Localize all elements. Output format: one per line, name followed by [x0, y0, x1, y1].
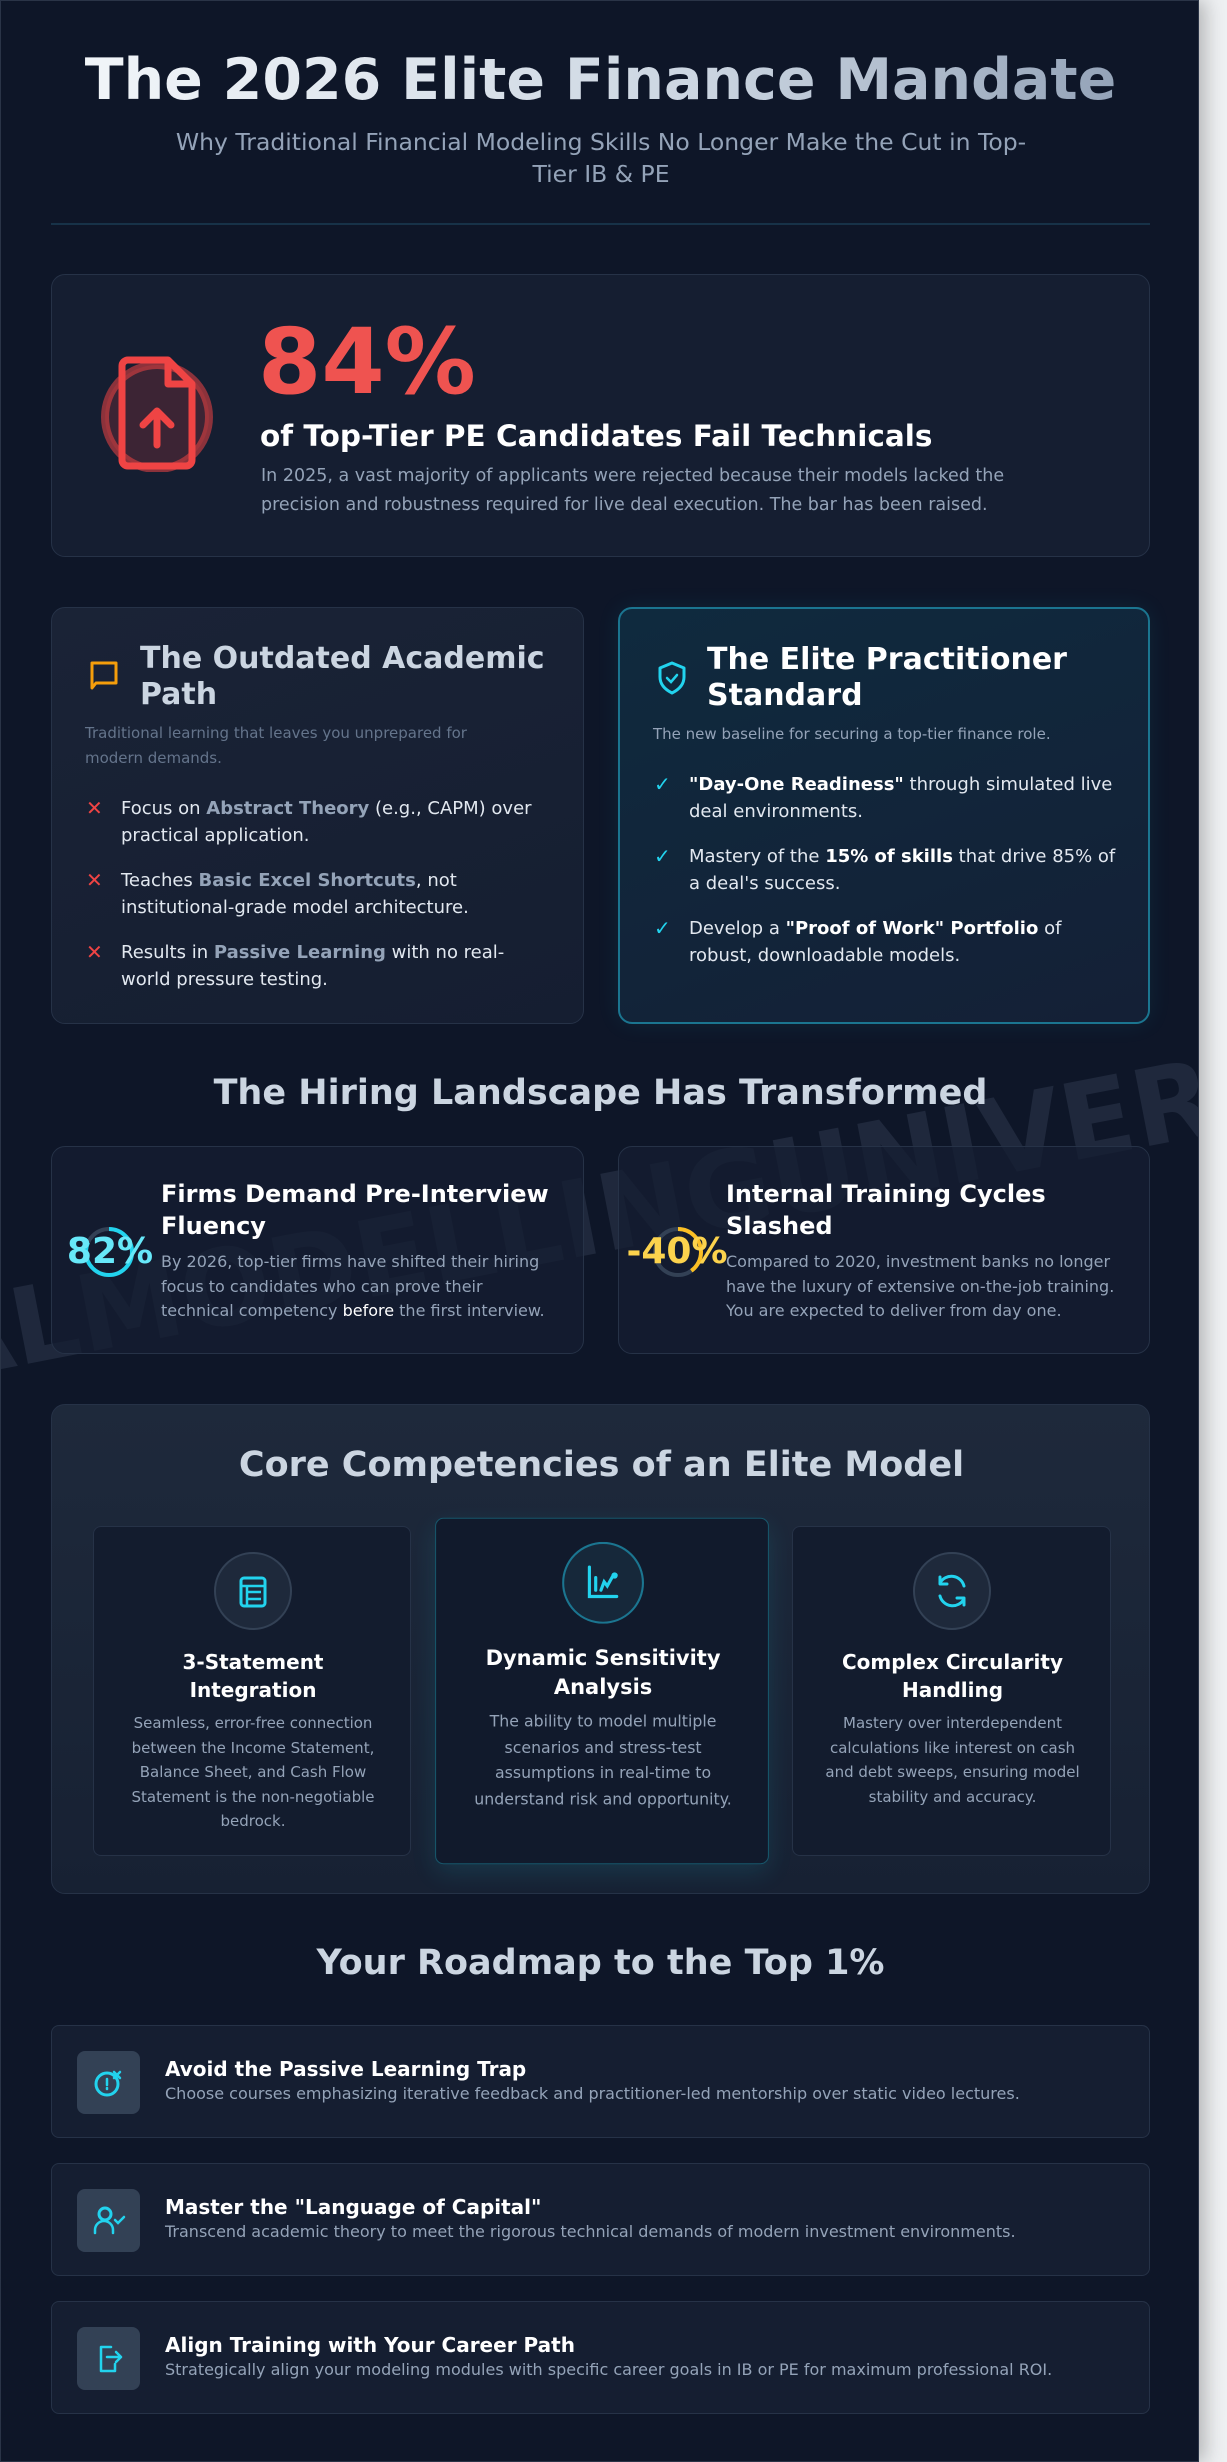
- panel: core competencies: [51, 1404, 1150, 1894]
- ring chart: [653, 1227, 703, 1277]
- panel: outdated academic path: ✕: [86, 868, 103, 892]
- heading: The Outdated Academic Path: [140, 641, 545, 712]
- icon: user check: [77, 2189, 140, 2252]
- panel: elite practitioner standard: ✓: [654, 772, 671, 796]
- roadmap item 2: [51, 2163, 1150, 2276]
- card: 3-statement: 3-Statement Integration: [182, 1650, 324, 1702]
- subtitle: Why Traditional Financial Modeling Skills No Longer Make the Cut in Top-Tier IB & PE: [176, 128, 1026, 188]
- title: The 2026 Elite Finance Mandate: [85, 47, 1116, 113]
- icon: chat: [90, 662, 118, 690]
- card: 3-statement: Seamless, error-free connection between the Income Statement, Balance Sheet, and Cash Flow Statement is the non-negotiable bedrock.: [131, 1714, 375, 1830]
- panel: outdated academic path: Teaches Basic Excel Shortcuts, not institutional-grade model architecture.: [121, 870, 469, 918]
- number: 82%: [67, 1231, 153, 1272]
- panel: elite practitioner standard: Mastery of the 15% of skills that drive 85% of a deal's success.: [689, 846, 1115, 894]
- stat description: In 2025, a vast majority of applicants were rejected because their models lacked the precision and robustness required for live deal execution. The bar has been raised.: [261, 466, 1004, 515]
- panel: outdated academic path: Focus on Abstract Theory (e.g., CAPM) over practical application.: [121, 798, 532, 846]
- card: circularity: [792, 1526, 1111, 1856]
- list: [86, 796, 532, 990]
- number: -40%: [626, 1231, 728, 1272]
- stat desc: Compared to 2020, investment banks no longer have the luxury of extensive on-the-job training. You are expected to deliver from day one.: [726, 1252, 1114, 1320]
- heading: roadmap: Your Roadmap to the Top 1%: [316, 1943, 884, 1983]
- panel: 84% stat: [51, 274, 1150, 557]
- panel: outdated academic path: ✕: [86, 940, 103, 964]
- roadmap item 2: Transcend academic theory to meet the rigorous technical demands of modern investment environments.: [165, 2222, 1016, 2241]
- list: [654, 772, 1116, 966]
- roadmap item 3: Strategically align your modeling modules with specific career goals in IB or PE for maximum professional ROI.: [165, 2360, 1052, 2379]
- icon: shield: [658, 662, 686, 694]
- panel: 82% stat: [51, 1146, 584, 1354]
- heading: hiring landscape: The Hiring Landscape Has Transformed: [214, 1073, 987, 1113]
- heading: The Elite Practitioner Standard: [707, 642, 1067, 713]
- panel: -40% stat: [618, 1146, 1150, 1354]
- card: sensitivity: Dynamic Sensitivity Analysis: [486, 1645, 721, 1699]
- panel: outdated academic path: ✕: [86, 796, 103, 820]
- stat desc: By 2026, top-tier firms have shifted their hiring focus to candidates who can prove their technical competency before the first interview.: [161, 1252, 545, 1320]
- roadmap item 3: [51, 2301, 1150, 2414]
- panel: elite practitioner standard: [618, 607, 1150, 1024]
- panel: elite practitioner standard: ✓: [654, 844, 671, 868]
- roadmap item 1: Avoid the Passive Learning Trap: [165, 2057, 526, 2081]
- stat title: Internal Training Cycles Slashed: [726, 1180, 1046, 1240]
- icon: export: [77, 2327, 140, 2390]
- stat heading: of Top-Tier PE Candidates Fail Technicals: [260, 419, 932, 453]
- big number: 84%: [258, 310, 476, 415]
- card: circularity: Mastery over interdependent calculations like interest on cash and debt sweeps, ensuring model stability and accuracy.: [825, 1714, 1080, 1806]
- icon: file upload: [101, 356, 213, 472]
- heading: Core Competencies of an Elite Model: [239, 1445, 964, 1485]
- subtitle: Traditional learning that leaves you unprepared for modern demands.: [85, 724, 467, 767]
- panel: elite practitioner standard: ✓: [654, 916, 671, 940]
- roadmap item 1: Choose courses emphasizing iterative feedback and practitioner-led mentorship over static video lectures.: [165, 2084, 1020, 2103]
- subtitle: The new baseline for securing a top-tier finance role.: [653, 725, 1051, 743]
- icon: statement: [214, 1552, 292, 1630]
- panel: elite practitioner standard: "Day-One Readiness" through simulated live deal environments.: [689, 774, 1112, 822]
- stat title: Firms Demand Pre-Interview Fluency: [161, 1180, 549, 1240]
- card: sensitivity: The ability to model multiple scenarios and stress-test assumptions in real-time to understand risk and opportunity.: [474, 1712, 732, 1808]
- icon: chart: [562, 1542, 644, 1624]
- icon: refresh: [913, 1552, 991, 1630]
- card: 3-statement: [93, 1526, 411, 1856]
- roadmap item 3: Align Training with Your Career Path: [165, 2333, 575, 2357]
- card: circularity: Complex Circularity Handling: [842, 1650, 1063, 1702]
- icon: target: [77, 2051, 140, 2114]
- roadmap item 1: [51, 2025, 1150, 2138]
- panel: elite practitioner standard: Develop a "Proof of Work" Portfolio of robust, downloadable models.: [689, 918, 1061, 966]
- panel: outdated academic path: Results in Passive Learning with no real-world pressure testing.: [121, 942, 504, 990]
- panel: outdated academic path: [51, 607, 584, 1024]
- card: sensitivity: [435, 1518, 769, 1864]
- roadmap item 2: Master the "Language of Capital": [165, 2195, 541, 2219]
- ring chart: [84, 1227, 134, 1277]
